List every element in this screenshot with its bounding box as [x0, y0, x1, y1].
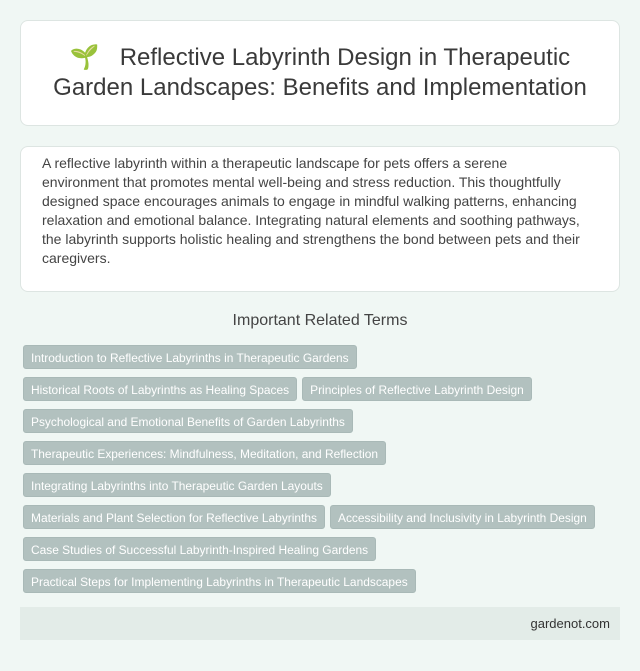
tags list: Therapeutic Experiences: Mindfulness, Meditation, and Reflection — [31, 447, 378, 461]
tags list: Principles of Reflective Labyrinth Design — [310, 383, 524, 397]
description card: caregivers. — [42, 250, 110, 266]
tags list: Historical Roots of Labyrinths as Healing Spaces — [31, 383, 289, 397]
tags list: Introduction to Reflective Labyrinths in Therapeutic Gardens — [31, 351, 349, 365]
tags list: Accessibility and Inclusivity in Labyrinth Design — [338, 511, 587, 525]
description card: the labyrinth supports holistic healing and strengthens the bond between pets and their — [42, 231, 580, 247]
title card: Garden Landscapes: Benefits and Implementation — [53, 74, 587, 101]
description card: A reflective labyrinth within a therapeutic landscape for pets offers a serene — [42, 155, 507, 171]
description card — [20, 146, 620, 292]
tags list: Psychological and Emotional Benefits of Garden Labyrinths — [31, 415, 345, 429]
footer: gardenot.com — [530, 616, 610, 631]
description card: relaxation and emotional balance. Integrating natural elements and soothing pathways, — [42, 212, 580, 228]
tags list: Materials and Plant Selection for Reflective Labyrinths — [31, 511, 317, 525]
description card: environment that promotes mental well-being and stress reduction. This thoughtfully — [42, 174, 561, 190]
tags list: Integrating Labyrinths into Therapeutic Garden Layouts — [31, 479, 323, 493]
heading: related terms: Important Related Terms — [233, 312, 407, 329]
tags list — [23, 345, 595, 593]
tags list: Practical Steps for Implementing Labyrinths in Therapeutic Landscapes — [31, 575, 408, 589]
title card — [20, 20, 620, 126]
footer — [20, 607, 620, 640]
tags list: Case Studies of Successful Labyrinth-Inspired Healing Gardens — [31, 543, 368, 557]
title card: 🌱 Reflective Labyrinth Design in Therapeutic — [70, 44, 570, 71]
description card: designed space encourages animals to engage in mindful walking patterns, enhancing — [42, 193, 577, 209]
